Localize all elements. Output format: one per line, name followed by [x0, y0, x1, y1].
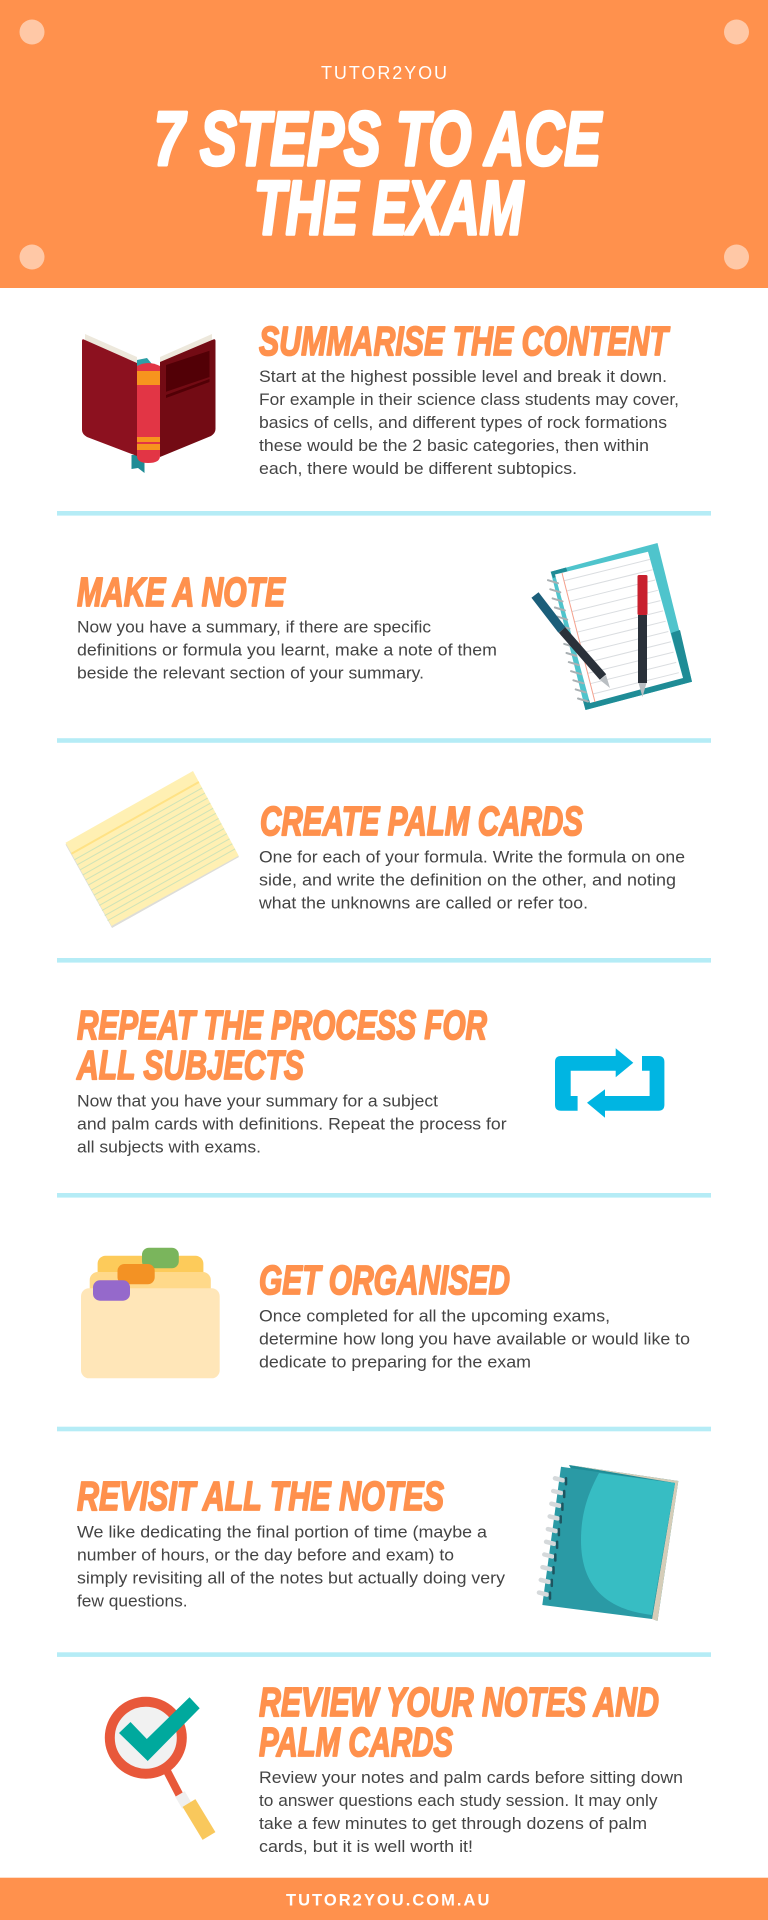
- body text: [77, 1522, 506, 1610]
- panel: make a note: [77, 543, 692, 710]
- body text: [259, 1306, 690, 1371]
- body text: [77, 618, 497, 683]
- body text: simply revisiting all of the notes but actually doing very: [77, 1568, 506, 1587]
- body text: each, there would be different subtopics.: [259, 459, 577, 478]
- panel: create palm cards: [66, 771, 685, 928]
- body text: [259, 367, 679, 478]
- body text: cards, but it is well worth it!: [259, 1837, 473, 1856]
- body text: Once completed for all the upcoming exams,: [259, 1306, 610, 1325]
- body text: We like dedicating the final portion of time (maybe a: [77, 1522, 488, 1541]
- icon: notebook and pens: [535, 543, 692, 710]
- footer banner: TUTOR2YOU.COM.AU: [286, 1892, 489, 1910]
- body text: beside the relevant section of your summary.: [77, 664, 424, 683]
- body text: basics of cells, and different types of rock formations: [259, 413, 667, 432]
- body text: [259, 1768, 683, 1856]
- body text: One for each of your formula. Write the formula on one: [259, 847, 685, 866]
- body text: [258, 847, 685, 912]
- body text: For example in their science class students may cover,: [259, 390, 679, 409]
- body text: these would be the 2 basic categories, then within: [259, 436, 649, 455]
- body text: Start at the highest possible level and break it down.: [259, 367, 667, 386]
- body text: [77, 1091, 507, 1156]
- body text: take a few minutes to get through dozens of palm: [259, 1814, 647, 1833]
- brand name: TUTOR2YOU: [321, 63, 447, 83]
- body text: side, and write the definition on the other, and noting: [259, 870, 676, 889]
- heading: [76, 1002, 487, 1088]
- body text: to answer questions each study session. It may only: [259, 1791, 658, 1810]
- body text: dedicate to preparing for the exam: [259, 1352, 531, 1371]
- panel: repeat the process: [76, 1002, 664, 1156]
- body text: number of hours, or the day before and exam) to: [77, 1545, 454, 1564]
- panel: summarise the content: [82, 318, 679, 478]
- body text: what the unknowns are called or refer too.: [258, 893, 588, 912]
- body text: definitions or formula you learnt, make a note of them: [77, 641, 497, 660]
- heading: PALM CARDS: [259, 1719, 453, 1765]
- icon: folder with tabs: [81, 1248, 220, 1378]
- icon: red book: [82, 334, 216, 473]
- title: 7 STEPS TO ACE: [154, 97, 603, 182]
- heading: CREATE PALM CARDS: [260, 798, 583, 844]
- body text: Now you have a summary, if there are specific: [77, 618, 431, 637]
- heading: GET ORGANISED: [259, 1257, 510, 1303]
- title: THE EXAM: [254, 166, 524, 251]
- body text: determine how long you have available or would like to: [259, 1329, 690, 1348]
- icon: teal spiral notebook: [539, 1465, 678, 1621]
- body text: and palm cards with definitions. Repeat the process for: [77, 1114, 507, 1133]
- body text: Review your notes and palm cards before sitting down: [259, 1768, 683, 1787]
- panel: revisit all the notes: [77, 1465, 678, 1621]
- icon: index card: [66, 771, 239, 928]
- body text: Now that you have your summary for a subject: [77, 1091, 438, 1110]
- heading: MAKE A NOTE: [77, 569, 286, 615]
- heading: REVISIT ALL THE NOTES: [77, 1473, 444, 1519]
- header banner: [0, 0, 768, 288]
- body text: all subjects with exams.: [77, 1137, 261, 1156]
- icon: magnifier with check mark: [110, 1697, 209, 1836]
- panel: review your notes: [110, 1679, 683, 1856]
- panel: get organised: [81, 1248, 690, 1378]
- title: [154, 97, 603, 251]
- heading: ALL SUBJECTS: [76, 1042, 304, 1088]
- icon: repeat arrows: [555, 1048, 664, 1118]
- footer banner: [0, 1878, 768, 1920]
- body text: few questions.: [77, 1591, 188, 1610]
- heading: [259, 1679, 659, 1765]
- heading: REPEAT THE PROCESS FOR: [77, 1002, 487, 1048]
